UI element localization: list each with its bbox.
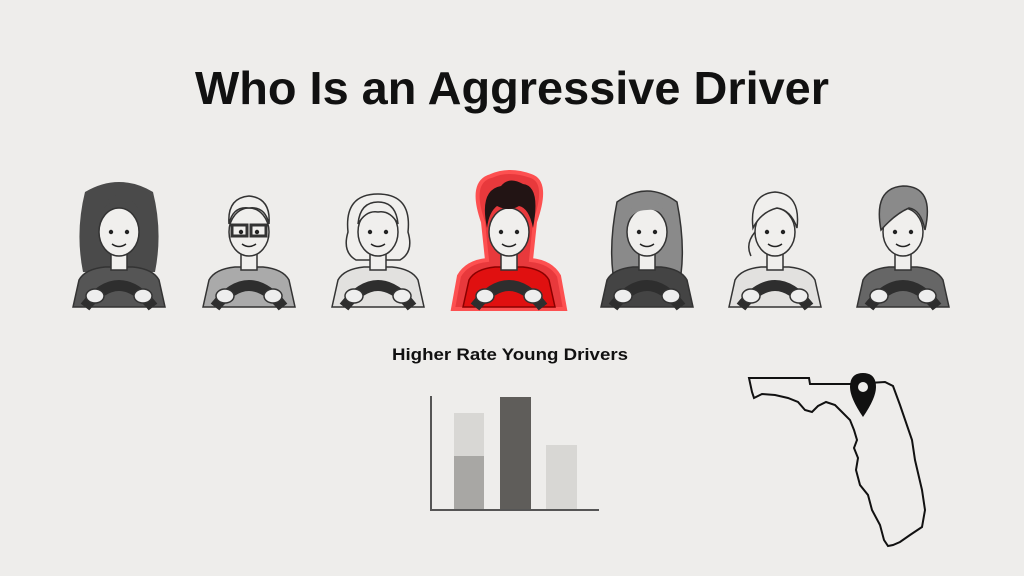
map: florida with pin xyxy=(749,373,925,546)
driver 2 xyxy=(203,196,295,307)
driver 5 xyxy=(601,191,693,307)
driver 7 xyxy=(857,186,949,307)
driver 1 xyxy=(73,182,165,307)
chart title: Higher Rate Young Drivers xyxy=(392,345,628,364)
title: Who Is an Aggressive Driver xyxy=(195,62,829,114)
bar chart xyxy=(430,396,599,510)
driver 4: highlighted young driver xyxy=(453,172,565,309)
driver 6 xyxy=(729,192,821,307)
drivers row xyxy=(73,172,949,309)
driver 3 xyxy=(332,194,424,307)
